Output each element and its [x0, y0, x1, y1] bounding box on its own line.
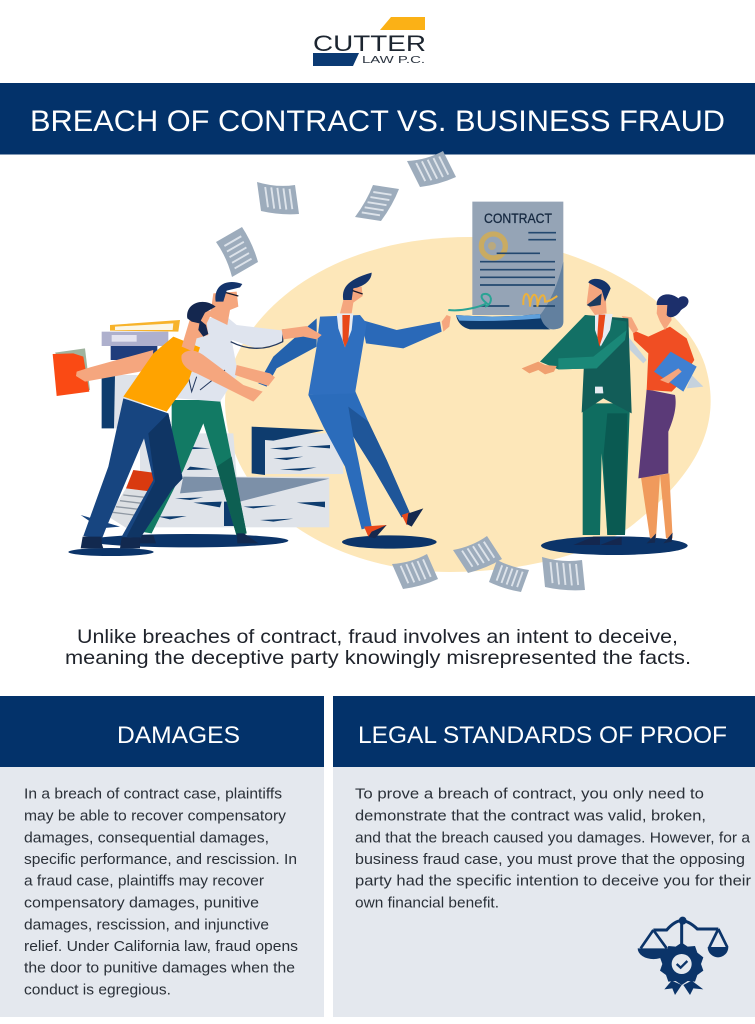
damages text: damages, rescission, and injunctive — [24, 918, 269, 934]
title banner — [0, 83, 755, 154]
hand gripping sleeve — [235, 365, 275, 386]
man in blue suit — [235, 273, 451, 549]
title banner: BREACH OF CONTRACT VS. BUSINESS FRAUD — [30, 105, 725, 138]
shoes — [364, 508, 423, 538]
ground shadows — [68, 534, 288, 556]
flying paper 3 — [355, 185, 400, 221]
illustration: breach of contract scene — [53, 151, 711, 593]
head — [340, 287, 363, 313]
intro statement — [65, 626, 691, 669]
left side group: stacks, books and two colleagues — [53, 282, 343, 556]
contract heading: CONTRACT — [484, 211, 552, 226]
intro statement: meaning the deceptive party knowingly misrepresented the facts. — [65, 647, 691, 669]
panel body — [0, 767, 324, 1017]
legal standards text: party had the specific intention to deceive you for their — [355, 874, 751, 890]
flying paper 2 — [257, 182, 299, 215]
logo: Cutter Law P.C. — [313, 17, 426, 66]
hand pulling contract — [442, 315, 451, 332]
contract sheet — [472, 202, 563, 329]
shirt and tie — [337, 313, 353, 347]
falling paper 8 — [542, 557, 585, 592]
damages text — [24, 786, 298, 998]
contract document — [448, 202, 563, 329]
seal — [481, 234, 505, 258]
logo: Cutter Law P.C.: LAW P.C. — [362, 55, 425, 66]
shadow under couple — [541, 536, 688, 555]
red book on ground — [81, 470, 158, 529]
right sleeve — [362, 320, 442, 348]
green ribbon — [448, 294, 491, 310]
legal standards heading: LEGAL STANDARDS OF PROOF — [358, 722, 727, 749]
stack of books — [102, 320, 180, 360]
falling paper 5 — [392, 554, 439, 590]
legal standards text: To prove a breach of contract, you only need to — [355, 786, 704, 802]
damages text: relief. Under California law, fraud opens — [24, 939, 298, 955]
damages heading — [0, 696, 324, 767]
man in green suit — [522, 279, 632, 545]
signature — [523, 294, 557, 307]
trousers — [308, 391, 410, 529]
rolled edge — [456, 314, 550, 329]
folder held by man — [53, 348, 90, 396]
legal standards text: demonstrate that the contract was valid, broken, — [355, 808, 706, 824]
document lines — [480, 233, 556, 306]
hand gripping shoulder — [282, 326, 322, 339]
damages text: compensatory damages, punitive — [24, 896, 259, 912]
page curl — [539, 262, 563, 329]
panel: damages — [0, 696, 324, 1017]
man in green trousers — [135, 282, 283, 543]
damages text: conduct is egregious. — [24, 982, 171, 998]
damages text: a fraud case, plaintiffs may recover — [24, 874, 264, 890]
icon: scales with award badge — [638, 917, 728, 995]
damages text: the door to punitive damages when the — [24, 960, 295, 976]
left sleeve — [258, 318, 317, 387]
flying paper 4 — [407, 151, 457, 188]
falling paper 7 — [489, 560, 529, 593]
legal standards heading — [333, 696, 755, 767]
panel: legal standards of proof — [333, 696, 755, 1017]
man in orange shirt — [53, 302, 263, 548]
shadow under man — [342, 535, 437, 549]
damages text: may be able to recover compensatory — [24, 808, 287, 824]
damages text: specific performance, and rescission. In — [24, 852, 297, 868]
hair — [343, 273, 372, 300]
panel body — [333, 767, 755, 1017]
legal standards text: business fraud case, you must prove that the opposing — [355, 852, 745, 868]
legal standards text — [355, 786, 751, 912]
intro statement: Unlike breaches of contract, fraud involves an intent to deceive, — [77, 626, 678, 648]
jacket — [308, 315, 367, 395]
tall paper stack behind — [102, 375, 237, 477]
flying paper 1 — [216, 226, 259, 277]
falling paper 6 — [453, 536, 503, 574]
glasses — [353, 291, 363, 294]
bottom paper stack — [153, 477, 329, 527]
legal standards text: own financial benefit. — [355, 896, 499, 912]
damages text: damages, consequential damages, — [24, 830, 269, 846]
woman — [622, 294, 703, 543]
logo: Cutter Law P.C.: CUTTER — [313, 31, 426, 56]
damages heading: DAMAGES — [117, 722, 240, 749]
man and woman on the right — [522, 279, 703, 555]
beige background blob — [225, 237, 711, 572]
right paper stack — [252, 427, 343, 475]
damages text: In a breach of contract case, plaintiffs — [24, 786, 282, 802]
legal standards text: and that the breach caused you damages. However, for a — [355, 830, 751, 846]
